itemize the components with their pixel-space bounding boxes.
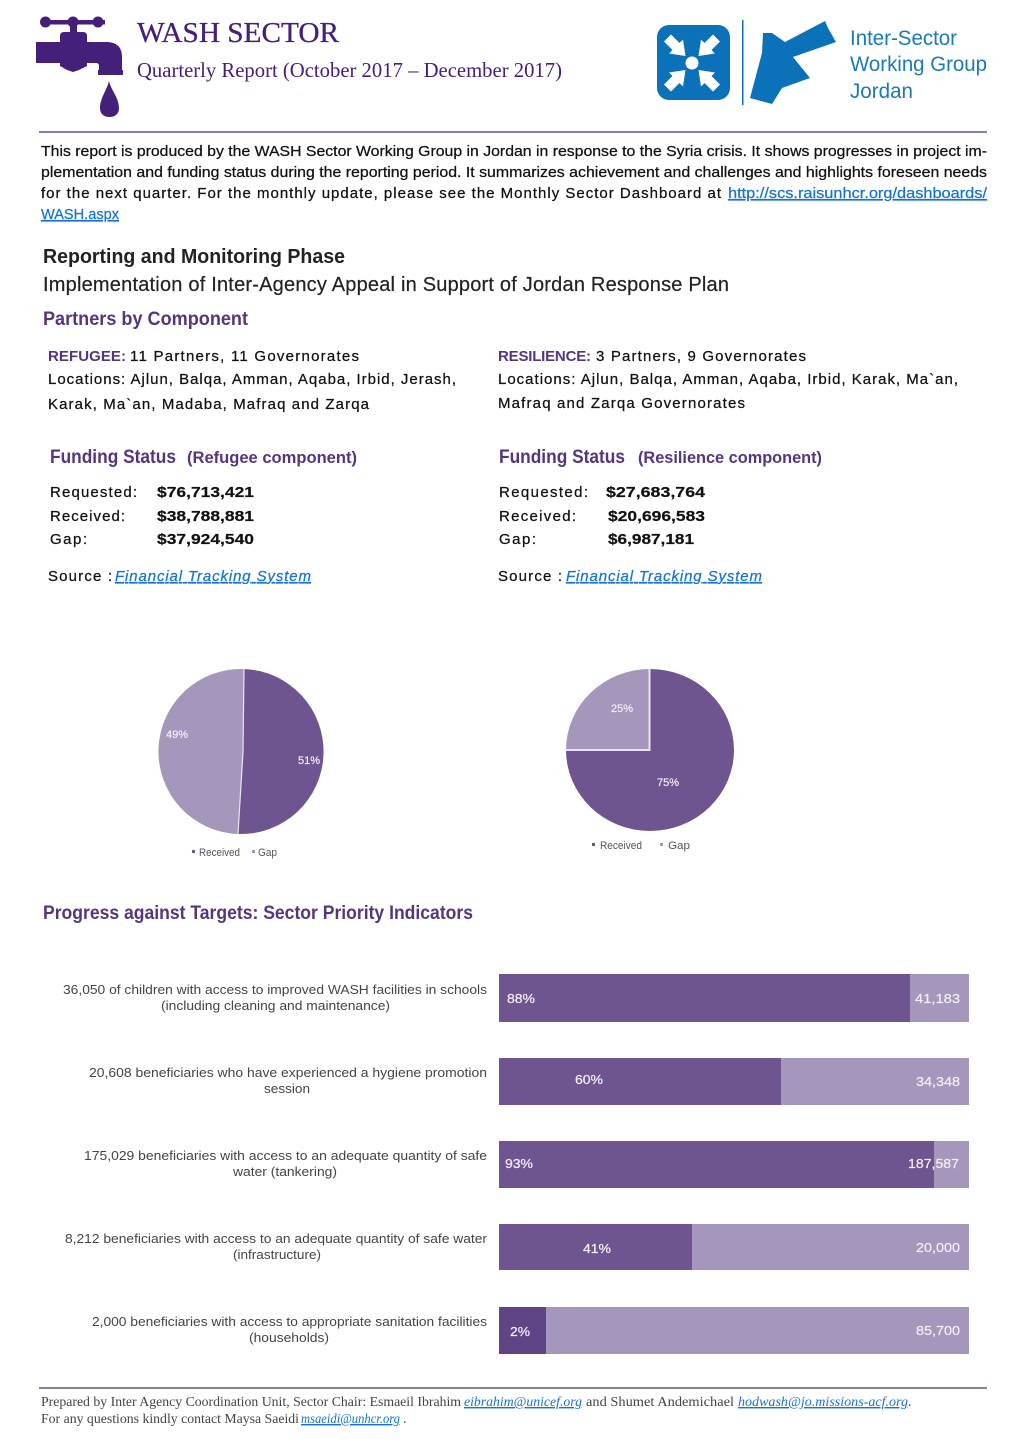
bar row 3: water tankering — [84, 1141, 969, 1188]
logo text: Jordan — [850, 80, 913, 103]
footer: eibrahim@unicef.org — [464, 1395, 582, 1410]
bar row 2: hygiene promotion: 34,348 — [916, 1074, 960, 1089]
panel: funding status refugee: (Refugee component) — [187, 448, 357, 467]
pie chart: refugee funding: 49% — [166, 729, 188, 741]
icon: water tap with drop — [36, 16, 123, 117]
panel: resilience partners: Mafraq and Zarqa Governorates — [498, 395, 745, 412]
logo: Inter-Sector Working Group Jordan — [657, 20, 987, 105]
pie chart: refugee funding: 51% — [298, 755, 320, 767]
subtitle: Quarterly Report (October 2017 – December 2017) — [137, 58, 562, 82]
panel: funding status refugee: Received: — [50, 508, 125, 525]
panel: funding status resilience: Received: — [499, 508, 576, 525]
bar row 2: hygiene promotion: 60% — [575, 1072, 603, 1087]
bar row 1: WASH facilities in schools: 41,183 — [915, 991, 960, 1006]
panel: funding status refugee: Source : — [48, 568, 112, 585]
footer: For any questions kindly contact Maysa Saeidi — [41, 1412, 299, 1427]
panel: funding status refugee — [48, 447, 357, 585]
intro text block: This report is produced by the WASH Sector Working Group in Jordan in response to the Syria crisis. It shows progresses in project im- — [41, 143, 987, 160]
bar row 3: water tankering: water (tankering) — [232, 1164, 337, 1179]
panel: funding status resilience: Funding Status — [499, 447, 625, 468]
footer: . — [403, 1412, 406, 1427]
panel: refugee partners: REFUGEE: — [48, 348, 126, 365]
pie chart: refugee funding — [158, 669, 324, 859]
bar row 4: water infrastructure: (infrastructure) — [233, 1247, 321, 1262]
panel: funding status resilience: $27,683,764 — [606, 484, 706, 501]
panel: funding status resilience: Financial Tracking System — [566, 568, 762, 585]
bar row 5: sanitation facilities: 85,700 — [916, 1323, 960, 1338]
footer — [41, 1395, 912, 1427]
heading: partners by component: Partners by Component — [43, 309, 249, 330]
intro text block: http://scs.raisunhcr.org/dashboards/ — [728, 185, 988, 202]
pie chart: resilience funding: 75% — [657, 777, 679, 789]
panel: funding status resilience: $6,987,181 — [608, 531, 694, 548]
bar row 2: hygiene promotion: session — [264, 1081, 310, 1096]
panel: refugee partners — [48, 348, 456, 413]
panel: resilience partners: RESILIENCE: — [498, 348, 591, 365]
bar row 1: WASH facilities in schools: 88% — [507, 991, 535, 1006]
pie chart: resilience funding: 25% — [611, 703, 633, 715]
bar row 1: WASH facilities in schools: (including cleaning and maintenance) — [161, 998, 390, 1013]
bar row 3: water tankering: 187,587 — [908, 1156, 959, 1171]
title: WASH SECTOR — [137, 18, 339, 49]
panel: refugee partners: Locations: Ajlun, Balqa, Amman, Aqaba, Irbid, Jerash, — [48, 371, 456, 388]
panel: funding status refugee: $38,788,881 — [157, 508, 254, 525]
pie chart: refugee funding: Received — [199, 847, 240, 859]
intro text block: WASH.aspx — [41, 206, 119, 223]
bar row 4: water infrastructure: 41% — [583, 1241, 611, 1256]
intro text block: plementation and funding status during the reporting period. It summarizes achievement and challenges and highlights foreseen needs — [41, 164, 987, 181]
panel: funding status resilience — [498, 447, 822, 585]
pie chart: resilience funding: Received — [600, 840, 642, 852]
bar row 4: water infrastructure: 20,000 — [916, 1240, 960, 1255]
panel: funding status resilience: Requested: — [499, 484, 588, 501]
panel: funding status refugee: Financial Tracking System — [115, 568, 311, 585]
bar row 2: hygiene promotion: 20,608 beneficiaries who have experienced a hygiene promotion — [89, 1065, 487, 1080]
footer: and Shumet Andemichael — [586, 1395, 734, 1410]
bar row 1: WASH facilities in schools: 36,050 of children with access to improved WASH facilities in schools — [63, 982, 488, 997]
intro text block — [41, 143, 988, 223]
icon: blue coordination square — [657, 25, 730, 100]
bar chart: sector priority indicators — [63, 974, 969, 1354]
pie chart: resilience funding — [566, 669, 734, 852]
logo text — [850, 27, 987, 103]
panel: refugee partners: 11 Partners, 11 Governorates — [130, 348, 359, 365]
bar row 4: water infrastructure — [65, 1224, 969, 1270]
bar row 2: hygiene promotion — [89, 1058, 969, 1105]
bar row 5: sanitation facilities — [92, 1307, 969, 1354]
panel: resilience partners: 3 Partners, 9 Governorates — [596, 348, 806, 365]
pie chart: resilience funding: Gap — [668, 840, 690, 852]
panel: refugee partners: Karak, Ma`an, Madaba, Mafraq and Zarqa — [48, 396, 370, 413]
bar row 5: sanitation facilities: (households) — [249, 1330, 329, 1345]
panel: funding status refugee: Gap: — [50, 531, 87, 548]
footer: . — [908, 1395, 912, 1410]
pie chart: refugee funding: Gap — [258, 847, 277, 859]
logo text: Working Group — [850, 53, 987, 76]
bar row 1: WASH facilities in schools — [63, 974, 969, 1022]
footer: hodwash@jo.missions-acf.org — [738, 1395, 908, 1410]
panel: funding status refugee: Requested: — [50, 484, 137, 501]
panel: funding status refugee: Funding Status — [50, 447, 176, 468]
logo text: Inter-Sector — [850, 27, 957, 50]
panel: funding status refugee: $76,713,421 — [157, 484, 254, 501]
bar row 3: water tankering: 175,029 beneficiaries with access to an adequate quantity of safe — [84, 1148, 487, 1163]
bar row 5: sanitation facilities: 2,000 beneficiaries with access to appropriate sanitation facilities — [92, 1314, 488, 1329]
heading: progress against targets: Progress against Targets: Sector Priority Indicators — [43, 903, 473, 924]
footer: msaeidi@unhcr.org — [301, 1412, 400, 1427]
panel: funding status resilience: Gap: — [499, 531, 536, 548]
panel: funding status refugee: $37,924,540 — [157, 531, 254, 548]
bar row 3: water tankering: 93% — [505, 1156, 533, 1171]
heading: implementation: Implementation of Inter-Agency Appeal in Support of Jordan Response Plan — [43, 274, 729, 296]
panel: funding status resilience: (Resilience component) — [638, 448, 822, 467]
panel: resilience partners — [498, 348, 958, 412]
footer: Prepared by Inter Agency Coordination Unit, Sector Chair: Esmaeil Ibrahim — [41, 1395, 461, 1410]
icon: map of Jordan — [750, 21, 836, 104]
panel: funding status resilience: $20,696,583 — [608, 508, 705, 525]
heading: reporting and monitoring phase: Reporting and Monitoring Phase — [43, 246, 345, 268]
bar row 5: sanitation facilities: 2% — [510, 1324, 530, 1339]
intro text block: for the next quarter. For the monthly update, please see the Monthly Sector Dashboard at — [41, 185, 722, 202]
panel: funding status resilience: Source : — [498, 568, 562, 585]
panel: resilience partners: Locations: Ajlun, Balqa, Amman, Aqaba, Irbid, Karak, Ma`an, — [498, 371, 958, 388]
bar row 4: water infrastructure: 8,212 beneficiaries with access to an adequate quantity of safe water — [65, 1231, 488, 1246]
